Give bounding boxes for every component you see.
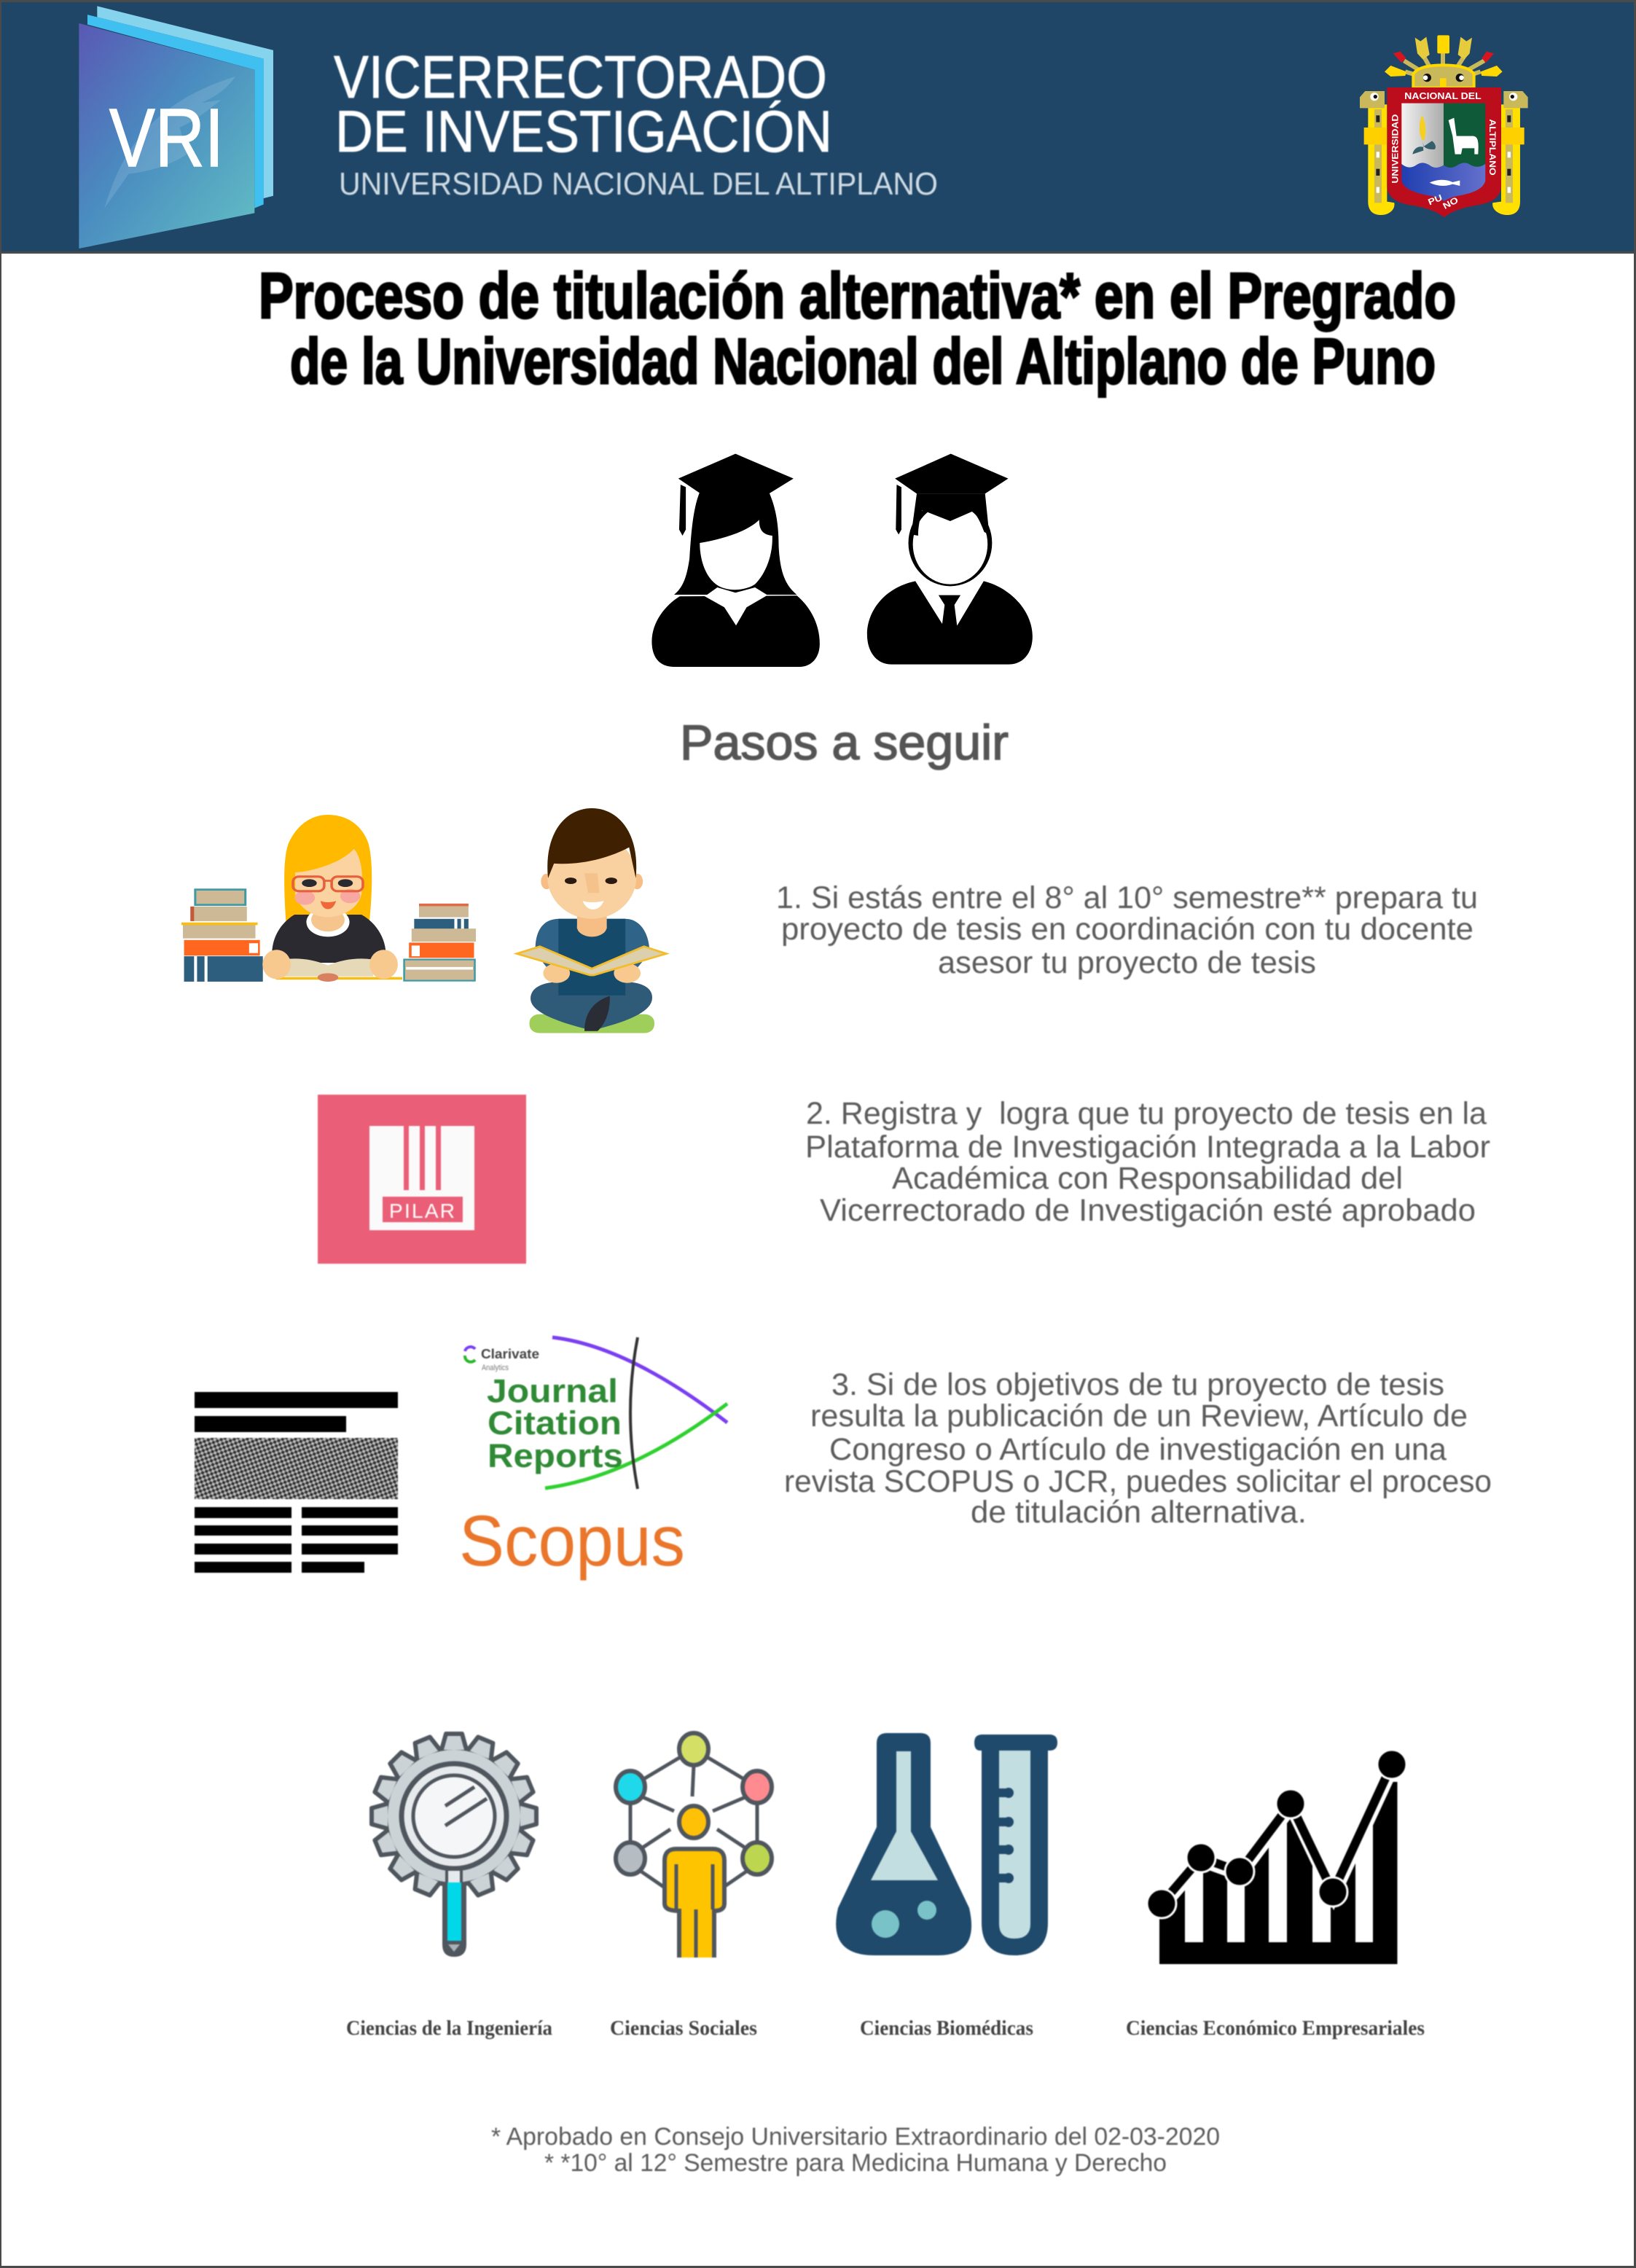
shield: ALTIPLANO [1487, 119, 1498, 176]
step 3 text: 3. Si de los objetivos de tu proyecto de tesis [831, 1367, 1444, 1402]
step 2 text: 2. Registra y logra que tu proyecto de tesis en la [806, 1096, 1487, 1131]
icon: university coat of arms [1360, 35, 1528, 217]
institution name: UNIVERSIDAD NACIONAL DEL ALTIPLANO [339, 166, 938, 202]
JCR words: Journal [487, 1372, 618, 1409]
step 2 text: Vicerrectorado de Investigación esté aprobado [820, 1193, 1476, 1228]
footnotes [491, 2123, 1220, 2177]
step 3 text: resulta la publicación de un Review, Artículo de [810, 1399, 1468, 1434]
institution name [334, 43, 938, 202]
heading: pasos a seguir: Pasos a seguir [680, 715, 1009, 770]
icon: gear with magnifier [372, 1734, 536, 1957]
clarivate mark: Clarivate [481, 1347, 539, 1361]
JCR words: Reports [488, 1437, 623, 1474]
shield: NO [1441, 195, 1460, 211]
icon: female graduate [651, 454, 820, 667]
crown rays [1385, 35, 1503, 88]
clarivate mark: Analytics [482, 1364, 509, 1372]
girl figure [262, 815, 402, 982]
logo: Journal Citation Reports [465, 1337, 727, 1489]
illustration: girl reading with stacks of books [181, 815, 476, 982]
step 3 text: Congreso o Artículo de investigación en una [829, 1432, 1447, 1467]
step 2 text [805, 1096, 1490, 1228]
step 3 text: revista SCOPUS o JCR, puedes solicitar el proceso [784, 1464, 1492, 1499]
title [259, 259, 1456, 397]
right book stack [404, 904, 476, 981]
step 1 text: asesor tu proyecto de tesis [938, 945, 1316, 980]
icon: VRI book logo: VRI [109, 92, 224, 184]
icon: bar and line chart [1147, 1750, 1406, 1964]
institution name: VICERRECTORADO [334, 43, 827, 111]
icon: PILAR logo: PILAR [389, 1200, 455, 1222]
step 3 text: de titulación alternativa. [971, 1495, 1307, 1530]
shield [1387, 87, 1501, 217]
shield: NACIONAL DEL [1404, 91, 1482, 101]
logo: Scopus: Scopus [459, 1501, 685, 1581]
icon: person network [616, 1733, 772, 1958]
discipline labels: Ciencias Sociales [610, 2017, 757, 2040]
icon: male graduate [867, 454, 1033, 665]
institution name: DE INVESTIGACIÓN [335, 99, 832, 165]
JCR words: Citation [488, 1404, 622, 1442]
header banner [1, 2, 1634, 254]
step 1 text: proyecto de tesis en coordinación con tu docente [781, 912, 1473, 947]
footnotes: * *10° al 12° Semestre para Medicina Humana y Derecho [544, 2149, 1167, 2177]
serpents [1360, 91, 1528, 215]
step 2 text: Plataforma de Investigación Integrada a la Labor [805, 1130, 1490, 1165]
step 2 text: Académica con Responsabilidad del [892, 1161, 1403, 1196]
discipline labels: Ciencias de la Ingeniería [346, 2017, 552, 2040]
discipline labels: Ciencias Biomédicas [860, 2017, 1033, 2040]
illustration: boy reading [517, 808, 666, 1033]
discipline labels [346, 2017, 1425, 2040]
step 1 text [776, 880, 1478, 980]
icon: flask and test tube [836, 1733, 1057, 1955]
step 1 text: 1. Si estás entre el 8° al 10° semestre** prepara tu [776, 880, 1478, 915]
arcs [545, 1337, 727, 1489]
shield: UNIVERSIDAD [1390, 114, 1400, 184]
clarivate mark [465, 1347, 539, 1372]
footnotes: * Aprobado en Consejo Universitario Extraordinario del 02-03-2020 [491, 2123, 1220, 2151]
icon: VRI book logo [79, 6, 273, 249]
left book stack [181, 890, 263, 982]
icon: journal article [195, 1392, 398, 1573]
discipline labels: Ciencias Económico Empresariales [1126, 2017, 1425, 2040]
shield: PU [1427, 192, 1444, 207]
icon: PILAR logo [318, 1095, 526, 1264]
JCR words [487, 1372, 623, 1474]
step 3 text [784, 1367, 1492, 1530]
